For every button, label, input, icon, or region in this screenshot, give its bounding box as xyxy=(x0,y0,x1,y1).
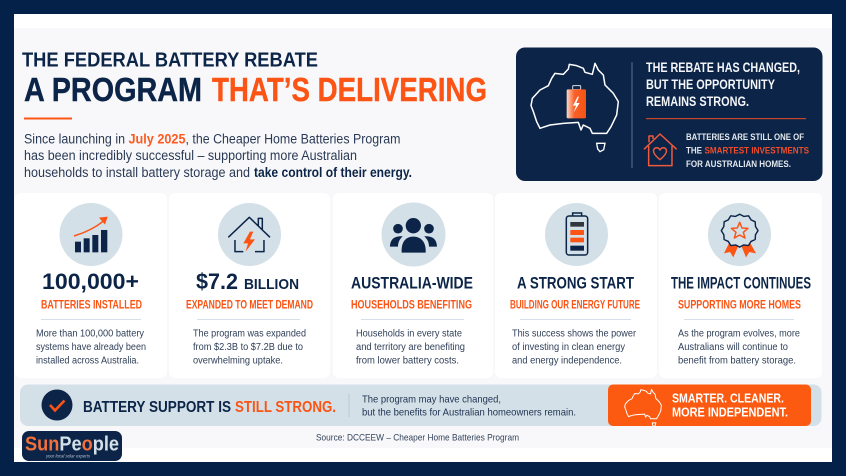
card text: benefit from battery storage. xyxy=(678,356,796,366)
panel: batteries installed: BATTERIES INSTALLED xyxy=(41,300,142,312)
icon: australia map with battery xyxy=(531,63,618,152)
panel: rebate callout xyxy=(516,48,822,181)
callout small text: BATTERIES ARE STILL ONE OF xyxy=(686,132,804,142)
card text: from $2.3B to $7.2B due to xyxy=(193,342,303,353)
callout small text: THE xyxy=(686,146,702,156)
panel: bottom banner xyxy=(20,384,822,426)
callout small text xyxy=(686,132,809,169)
card text xyxy=(678,328,800,366)
card text: from lower battery costs. xyxy=(356,356,459,366)
icon: people xyxy=(390,218,437,253)
panel: impact continues xyxy=(659,193,822,378)
icon: battery xyxy=(566,213,588,255)
icon: australia outline xyxy=(625,389,661,426)
logo: SunPeople xyxy=(25,434,119,456)
card text: More than 100,000 battery xyxy=(36,328,144,340)
intro text xyxy=(24,132,412,180)
card text: systems have already been xyxy=(36,342,146,353)
card text: Households in every state xyxy=(356,328,462,340)
banner text xyxy=(362,394,576,418)
intro text: households to install battery storage and xyxy=(24,165,250,180)
icon: check mark xyxy=(42,390,72,420)
callout heading: THE REBATE HAS CHANGED, xyxy=(646,60,800,75)
panel: strong start: BUILDING OUR ENERGY FUTURE xyxy=(510,300,640,312)
panel: strong start: A STRONG START xyxy=(517,274,634,292)
intro text: Since launching in xyxy=(24,132,125,146)
intro text: July 2025 xyxy=(128,132,186,146)
card text: of investing in clean energy xyxy=(512,342,625,353)
panel: batteries installed xyxy=(15,193,167,378)
card text: overwhelming uptake. xyxy=(193,356,283,366)
title: A PROGRAM xyxy=(24,71,202,108)
card text xyxy=(193,328,306,366)
intro text: has been incredibly successful – supporting more Australian xyxy=(24,148,357,163)
title: THAT’S DELIVERING xyxy=(212,71,487,108)
card text xyxy=(512,328,637,366)
card text: Australians will continue to xyxy=(678,342,788,353)
panel: 7.2 billion: $7.2 xyxy=(196,269,238,294)
card text: and energy independence. xyxy=(512,356,622,366)
card text xyxy=(356,328,465,366)
callout: smarter cleaner: SMARTER. CLEANER. xyxy=(672,392,784,406)
panel: australia-wide xyxy=(333,193,493,378)
callout: smarter cleaner: MORE INDEPENDENT. xyxy=(672,406,788,420)
icon: bar chart with arrow xyxy=(74,217,108,252)
card text: and territory are benefiting xyxy=(356,342,465,353)
intro text: , the Cheaper Home Batteries Program xyxy=(186,132,400,146)
icon: award badge xyxy=(721,214,758,257)
source: Source: DCCEEW – Cheaper Home Batteries Program xyxy=(316,432,519,442)
logo: your local solar experts xyxy=(45,454,91,458)
callout: smarter cleaner xyxy=(608,384,811,426)
card text: installed across Australia. xyxy=(36,356,139,366)
panel: impact continues: SUPPORTING MORE HOMES xyxy=(678,300,801,312)
title: THE FEDERAL BATTERY REBATE xyxy=(22,50,318,72)
callout small text: SMARTEST INVESTMENTS xyxy=(704,146,809,156)
banner heading: BATTERY SUPPORT IS xyxy=(83,399,231,416)
banner text: but the benefits for Australian homeowners remain. xyxy=(362,408,576,418)
panel: 7.2 billion: BILLION xyxy=(244,276,299,293)
panel: australia-wide: HOUSEHOLDS BENEFITING xyxy=(351,300,472,312)
panel: 7.2 billion: EXPANDED TO MEET DEMAND xyxy=(186,300,313,312)
banner heading: STILL STRONG. xyxy=(235,399,336,416)
card text: The program was expanded xyxy=(193,328,306,340)
callout heading: BUT THE OPPORTUNITY xyxy=(646,77,775,92)
panel: strong start xyxy=(495,193,657,378)
icon: house with heart xyxy=(644,134,677,166)
banner heading xyxy=(83,399,336,416)
icon: house with bolt xyxy=(228,217,270,252)
panel: australia-wide: AUSTRALIA-WIDE xyxy=(351,274,473,292)
title xyxy=(22,50,487,108)
callout heading: REMAINS STRONG. xyxy=(646,94,749,109)
card text: This success shows the power xyxy=(512,328,637,340)
intro text: take control of their energy. xyxy=(254,165,412,180)
callout small text: FOR AUSTRALIAN HOMES. xyxy=(686,159,791,169)
banner text: The program may have changed, xyxy=(362,394,501,406)
callout heading xyxy=(646,60,800,109)
panel: 7.2 billion xyxy=(169,193,330,378)
card text: As the program evolves, more xyxy=(678,328,800,340)
card text xyxy=(36,328,146,366)
panel: batteries installed: 100,000+ xyxy=(42,269,139,294)
